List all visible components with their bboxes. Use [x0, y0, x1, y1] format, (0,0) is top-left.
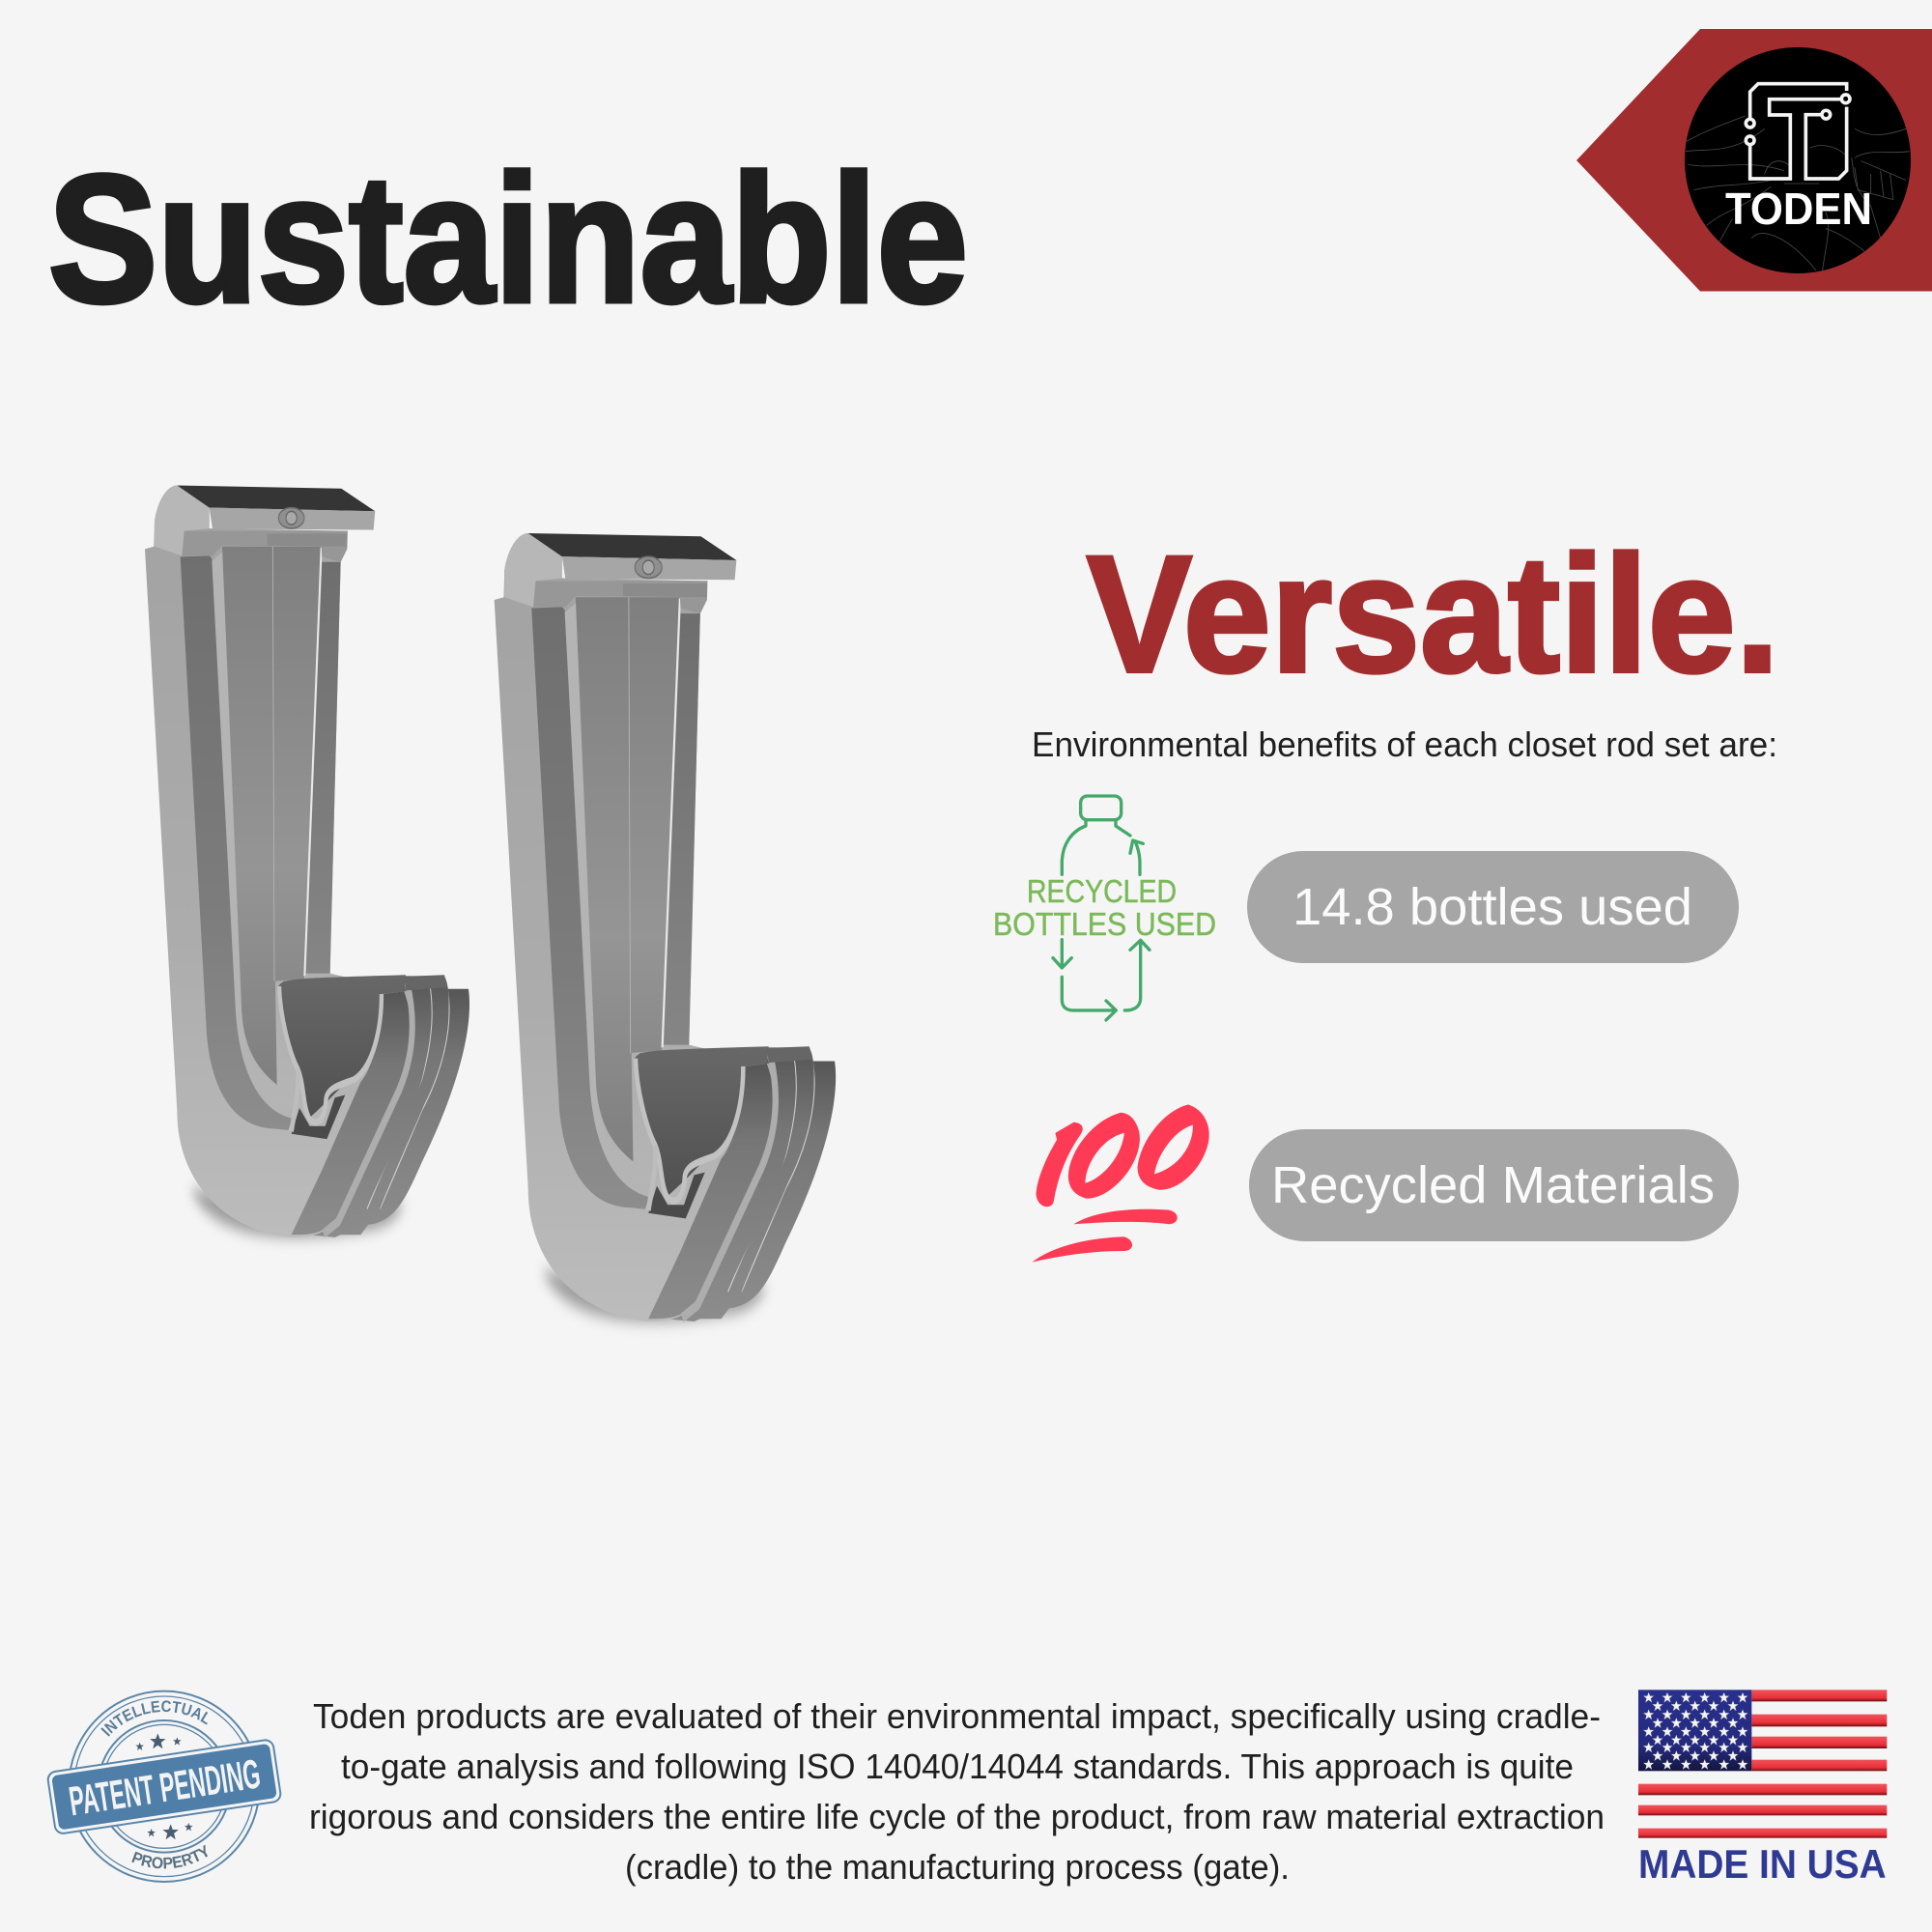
stamp stars [135, 1733, 193, 1839]
stamp top text: INTELLECTUAL [100, 1700, 209, 1737]
footer paragraph [309, 1696, 1605, 1887]
product image: left bracket [145, 485, 469, 1237]
flag stripes [1638, 1690, 1887, 1838]
black logo circle [1685, 47, 1911, 273]
stamp: patent pending [46, 1690, 282, 1883]
T circuit mark [1746, 84, 1850, 179]
product image: right bracket [495, 533, 836, 1321]
pill: Recycled Materials: Recycled Materials [1271, 1156, 1715, 1214]
pill: Recycled Materials [1249, 1129, 1739, 1241]
icon label line 2: BOTTLES USED [993, 906, 1216, 942]
flag canton with stars [1638, 1690, 1751, 1771]
pill: 14.8 bottles used: 14.8 bottles used [1293, 878, 1692, 936]
icon: recycled bottles [993, 796, 1216, 1020]
heading: Versatile.: Versatile. [1087, 522, 1779, 707]
logo badge: Toden [1577, 29, 1932, 292]
bottle and arrows [1053, 796, 1150, 1020]
map contour lines [1686, 116, 1910, 270]
made in USA flag [1638, 1690, 1887, 1887]
footer paragraph: rigorous and considers the entire life cycle of the product, from raw material extraction [309, 1797, 1605, 1836]
icon label line 1: RECYCLED [1027, 873, 1177, 909]
footer paragraph: to-gate analysis and following ISO 14040/14044 standards. This approach is quite [341, 1747, 1574, 1786]
pill: 14.8 bottles used [1247, 851, 1739, 963]
stamp banner: PATENT PENDING [66, 1750, 264, 1825]
made in USA label: MADE IN USA [1638, 1842, 1887, 1887]
footer paragraph: Toden products are evaluated of their environmental impact, specifically using cradle- [313, 1696, 1601, 1736]
red arrow banner [1577, 29, 1932, 292]
stamp banner [47, 1739, 282, 1834]
title: Sustainable: Sustainable [48, 137, 968, 340]
intro text: Environmental benefits of each closet rod set are: [1032, 724, 1777, 764]
logo wordmark: TODEN [1725, 184, 1872, 234]
stamp rings [69, 1691, 260, 1882]
icon: 100 emoji [1032, 1105, 1208, 1263]
footer paragraph: (cradle) to the manufacturing process (gate). [625, 1847, 1290, 1887]
stamp bottom text: PROPERTY [131, 1845, 209, 1868]
